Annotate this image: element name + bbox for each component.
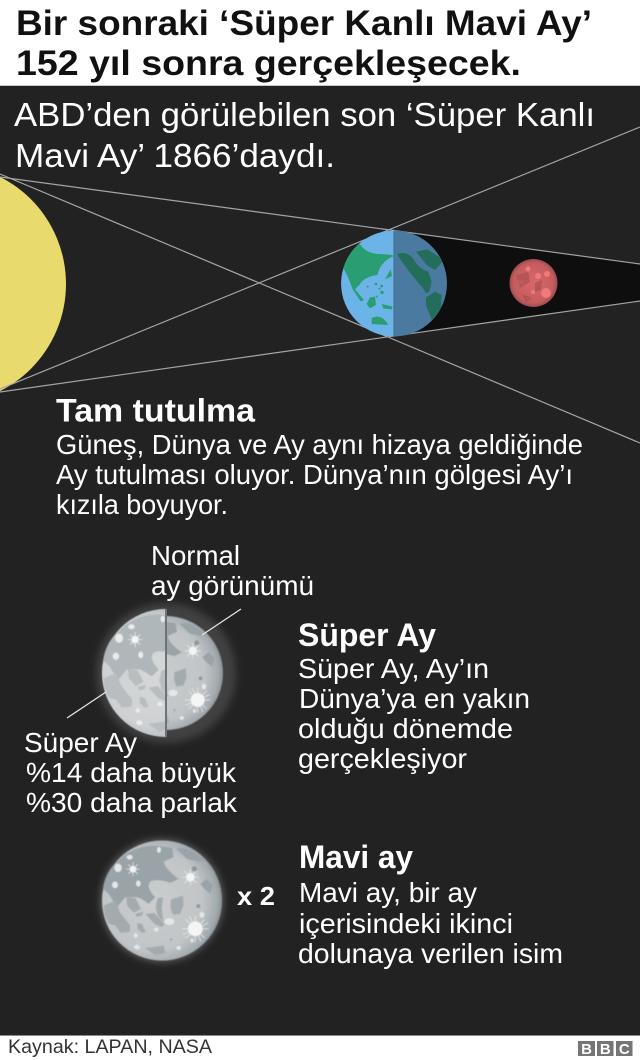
subtitle	[14, 96, 595, 174]
subtitle: Mavi Ay’ 1866’daydı.	[15, 137, 335, 174]
BBC logo	[578, 1041, 632, 1058]
text: super moon: Süper Ay	[298, 617, 436, 653]
label: super moon: Süper Ay	[24, 727, 137, 758]
blood moon	[510, 259, 558, 307]
header background	[0, 0, 640, 85]
body: total eclipse: Güneş, Dünya ve Ay aynı hizaya geldiğinde	[56, 429, 583, 460]
BBC logo: B	[581, 1041, 592, 1058]
heading: total eclipse: Tam tutulma	[56, 392, 255, 428]
text: blue moon: içerisindeki ikinci	[299, 908, 513, 939]
body: total eclipse: kızıla boyuyor.	[56, 489, 228, 520]
label: super moon: %30 daha parlak	[26, 787, 237, 818]
BBC logo: C	[619, 1041, 630, 1058]
label: x 2: x 2	[237, 881, 275, 911]
text: super moon: Süper Ay, Ay’ın	[298, 653, 489, 684]
label: normal moon: ay görünümü	[151, 570, 314, 601]
shadow lines	[0, 127, 640, 443]
source: Kaynak: LAPAN, NASA	[8, 1036, 212, 1058]
sun	[0, 164, 66, 404]
subtitle: ABD’den görülebilen son ‘Süper Kanlı	[14, 96, 595, 133]
text: super moon: Dünya’ya en yakın	[299, 683, 530, 714]
text: super moon: olduğu dönemde	[298, 713, 513, 744]
label: super moon: %14 daha büyük	[26, 757, 236, 788]
body: total eclipse: Ay tutulması oluyor. Dünya’nın gölgesi Ay’ı	[56, 459, 573, 490]
text: blue moon: dolunaya verilen isim	[298, 938, 563, 969]
total eclipse text	[56, 392, 583, 520]
body: total eclipse	[56, 429, 583, 520]
title: Bir sonraki ‘Süper Kanlı Mavi Ay’	[16, 4, 592, 43]
label: normal moon	[151, 540, 314, 601]
pointer lines	[67, 609, 241, 718]
label: normal moon: Normal	[151, 540, 240, 571]
text: super moon	[298, 617, 530, 774]
label: super moon	[24, 727, 237, 818]
title	[16, 4, 592, 83]
BBC logo: B	[600, 1041, 611, 1058]
panel edges	[0, 85, 640, 86]
text: super moon: gerçekleşiyor	[298, 743, 467, 774]
text: blue moon: Mavi ay	[299, 839, 413, 875]
text: blue moon	[298, 839, 563, 969]
title: 152 yıl sonra gerçekleşecek.	[16, 44, 521, 83]
super moon comparison	[96, 603, 236, 743]
text: blue moon: Mavi ay, bir ay	[299, 877, 477, 908]
eclipse diagram	[0, 127, 640, 443]
earth shadow cone	[394, 231, 640, 336]
blue moon illustration	[101, 840, 223, 962]
earth	[341, 230, 447, 336]
